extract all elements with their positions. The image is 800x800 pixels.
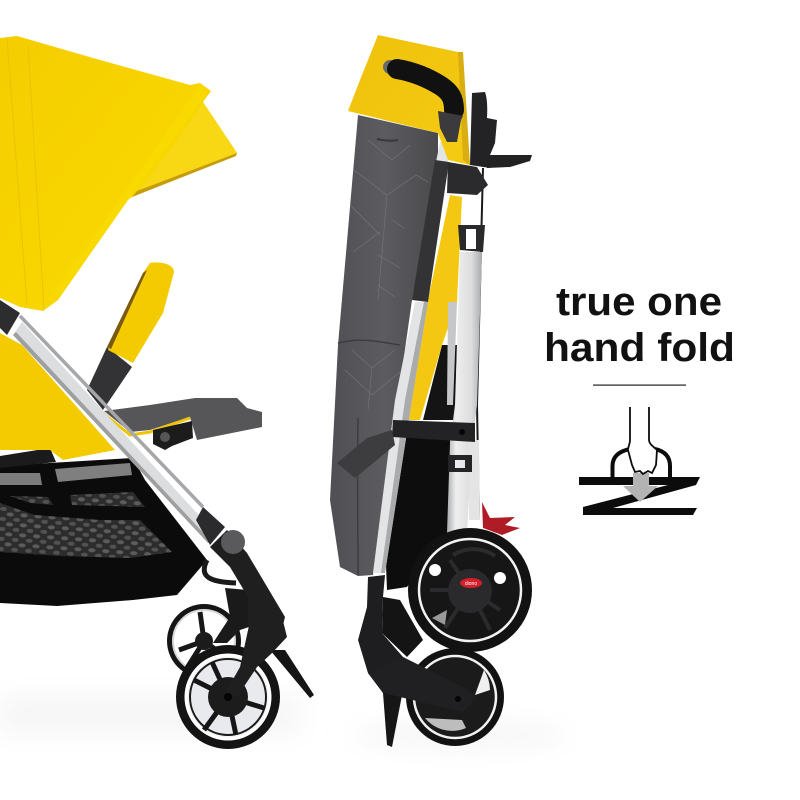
cross bar (392, 420, 475, 442)
small lower wheel (368, 648, 504, 746)
rear thin tube (20, 316, 203, 507)
lower leg and fork (358, 575, 423, 747)
lower strap loop (448, 455, 472, 472)
left stroller: side view (0, 36, 314, 749)
silver left tube (373, 142, 450, 573)
upper strap loop (458, 225, 485, 252)
inner basket (385, 437, 452, 590)
yellow hood top (348, 35, 470, 165)
frame bracket (447, 162, 488, 195)
icon: one hand fold (579, 407, 700, 515)
silver right tube (447, 252, 482, 533)
front wheel (176, 621, 287, 749)
red latch (482, 502, 520, 535)
seat pad (103, 398, 262, 450)
lower seat back (0, 333, 115, 460)
heading: true one hand fold (544, 280, 735, 370)
heading: true one hand fold: hand fold (544, 326, 735, 370)
black frame joint and legs (196, 507, 314, 698)
rear clip and handle hardware (470, 92, 497, 517)
basket with mesh (0, 448, 207, 606)
heading: true one hand fold: true one (556, 280, 722, 324)
footrest tray (487, 155, 532, 168)
large upper wheel (408, 528, 532, 652)
canopy (0, 36, 237, 311)
ground shadow (0, 695, 570, 749)
divider under heading (593, 384, 686, 386)
handle grip (383, 60, 463, 142)
main silver frame tube (13, 322, 217, 543)
wheel logo: diono (465, 581, 477, 587)
yellow inner fabric (380, 195, 462, 497)
armrest with bracket (87, 262, 174, 410)
grey folded seat (330, 115, 438, 576)
fold lever (337, 430, 395, 478)
right stroller: folded (330, 35, 532, 747)
black sleeve on tube (412, 160, 449, 302)
thin silver inner tube (447, 302, 457, 405)
seat hinge bracket (0, 300, 20, 335)
rear wheel (167, 604, 241, 678)
